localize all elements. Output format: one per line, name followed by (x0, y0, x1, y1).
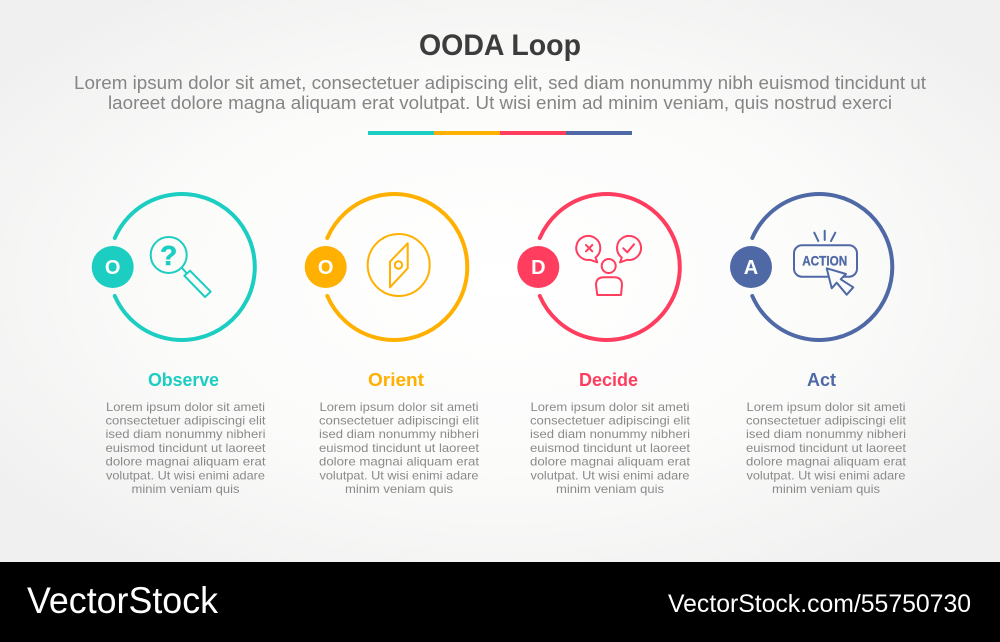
badge: O (305, 246, 347, 288)
description: act: minim veniam quis (772, 482, 880, 496)
description: act: Lorem ipsum dolor sit ameti (746, 400, 906, 414)
description: observe: minim veniam quis (132, 482, 240, 496)
subtitle text: Lorem ipsum dolor sit amet, consectetuer adipiscing elit, sed diam nonummy nibh euismod tincidunt ut (74, 73, 926, 93)
description: observe: Lorem ipsum dolor sit ameti (106, 400, 265, 414)
description: act: volutpat. Ut wisi enimi adare (746, 468, 906, 482)
description: decide: euismod tincidunt ut laoreet (530, 441, 691, 455)
panel: act (730, 194, 907, 496)
description: orient: dolore magnai aliquam erat (319, 455, 480, 469)
badge: O (92, 246, 134, 288)
description: act: consectetuer adipiscingi elit (746, 414, 907, 428)
description: orient: euismod tincidunt ut laoreet (319, 441, 480, 455)
subtitle text (74, 73, 926, 113)
description: decide: ised diam nonummy nibheri (530, 427, 690, 441)
badge: O: O (318, 257, 333, 279)
icon: action button with cursor (794, 231, 857, 295)
icon: magnifying glass with question mark: ? (160, 240, 177, 271)
description: act: dolore magnai aliquam erat (746, 455, 907, 469)
description: orient: minim veniam quis (345, 482, 453, 496)
badge: A (730, 246, 772, 288)
description: observe: dolore magnai aliquam erat (106, 455, 266, 469)
description: decide: minim veniam quis (556, 482, 664, 496)
title: OODA Loop (419, 29, 581, 62)
panel: decide (517, 194, 691, 496)
description: observe: volutpat. Ut wisi enimi adare (106, 468, 265, 482)
badge: D (517, 246, 559, 288)
ring: observe (115, 194, 255, 340)
description: observe: euismod tincidunt ut laoreet (106, 441, 266, 455)
badge: D: D (531, 257, 546, 279)
four-colour divider bar (368, 131, 632, 135)
description: observe (106, 400, 266, 496)
footer URL text: VectorStock.com/55750730 (668, 590, 971, 618)
footer logo text: VectorStock (27, 580, 218, 621)
heading: Orient: Orient (368, 369, 424, 390)
icon: compass (368, 234, 430, 296)
description: decide (530, 400, 691, 496)
description: decide: dolore magnai aliquam erat (530, 455, 691, 469)
description: act (746, 400, 907, 496)
badge: O: O (105, 257, 120, 279)
icon: magnifying glass with question mark (151, 237, 211, 297)
description: orient: Lorem ipsum dolor sit ameti (320, 400, 478, 414)
subtitle text: laoreet dolore magna aliquam erat volutpat. Ut wisi enim ad minim veniam, quis nostrud exerci (108, 93, 892, 113)
badge: A: A (744, 257, 758, 279)
watermark footer band (0, 562, 1000, 642)
description: orient: consectetuer adipiscingi elit (319, 414, 480, 428)
description: decide: consectetuer adipiscingi elit (530, 414, 691, 428)
ring: decide (540, 194, 680, 340)
description: observe: consectetuer adipiscingi elit (106, 414, 266, 428)
description: act: euismod tincidunt ut laoreet (746, 441, 907, 455)
panel: observe (92, 194, 266, 496)
heading: Act: Act (807, 369, 836, 390)
icon: person deciding between cross and check (576, 236, 641, 295)
heading: Observe: Observe (148, 369, 219, 390)
description: decide: Lorem ipsum dolor sit ameti (530, 400, 690, 414)
description: orient (319, 400, 480, 496)
description: orient: ised diam nonummy nibheri (319, 427, 479, 441)
description: observe: ised diam nonummy nibheri (106, 427, 266, 441)
heading: Decide: Decide (579, 369, 638, 390)
description: act: ised diam nonummy nibheri (746, 427, 906, 441)
ring: orient (327, 194, 467, 340)
ring: act (752, 194, 892, 340)
icon: action button with cursor: ACTION (802, 253, 847, 268)
description: orient: volutpat. Ut wisi enimi adare (320, 468, 479, 482)
panel: orient (305, 194, 480, 496)
description: decide: volutpat. Ut wisi enimi adare (530, 468, 690, 482)
